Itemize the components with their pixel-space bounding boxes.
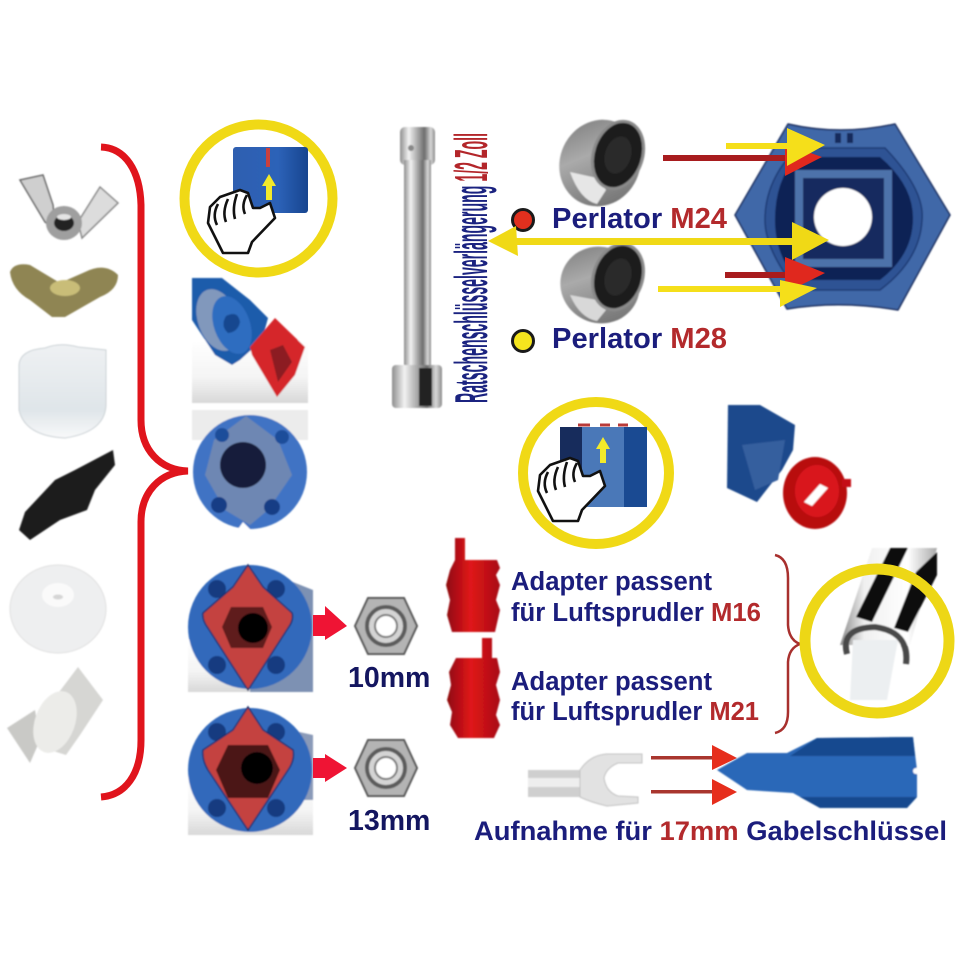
icon: black wing nut [19, 450, 115, 540]
top notches [835, 133, 853, 143]
yellow top arrow [726, 128, 825, 166]
yellow up arrow [262, 174, 276, 200]
centre hole [814, 188, 872, 246]
red top arrow [663, 144, 822, 176]
red marks [578, 424, 628, 426]
photo: blue tool end view [192, 410, 308, 534]
yellow double arrow [488, 222, 829, 260]
square socket [799, 174, 888, 263]
label: 10mm: 10mm [348, 662, 430, 694]
icon: red adapter M16 [446, 538, 500, 632]
label: Luftsprudler M16: für Luftsprudler M16 [511, 599, 761, 627]
icon: white round nut [10, 565, 106, 653]
icon: silver wing nut [20, 175, 118, 240]
wing nuts column [7, 175, 118, 763]
dark red brace [775, 555, 800, 733]
photo: 13 mm adapter view [188, 707, 313, 835]
icon: brass wing nut [10, 264, 118, 317]
arrow: to 13 mm nut [313, 754, 347, 782]
upper arrow [651, 745, 737, 770]
label: 13mm: 13mm [348, 805, 430, 837]
label: wrench caption: Aufnahme für 17mm Gabelschlüssel [474, 816, 947, 846]
panel: yellow circle with pull cylinder [184, 124, 332, 272]
icon: socket extension bar [392, 127, 442, 408]
blue block [560, 427, 647, 507]
icon: 13 mm nut [355, 740, 417, 796]
label: adapter M21: Adapter passent [511, 668, 713, 696]
icon: brass wing nut centre [50, 280, 80, 296]
icon: perlator M24 [545, 106, 655, 220]
icon: blue hex end [735, 124, 950, 310]
icon: red adapter M21 [447, 638, 500, 738]
icon: blue tool with red ring [727, 405, 851, 529]
marker: red dot [512, 210, 534, 230]
inner recess [775, 157, 913, 280]
icon: hand [208, 190, 275, 253]
label: Perlator M28: Perlator M28 [552, 323, 727, 355]
label: adapter M16: Adapter passent [511, 568, 713, 596]
icon: 10 mm nut [355, 598, 417, 654]
icon: hand [538, 458, 605, 521]
panel: yellow circle with blue slotted block [523, 402, 669, 544]
arrows: perlator to hex [488, 128, 829, 307]
arrow: to 10 mm nut [313, 606, 347, 640]
icon: open-end wrench [528, 754, 642, 806]
outer groove [765, 148, 922, 290]
faucet water [850, 640, 898, 700]
lower arrow [651, 779, 737, 805]
yellow lower arrow [658, 280, 817, 307]
photo: blue tool with red adapter [188, 278, 308, 403]
icon: white flat wing nut [7, 667, 103, 763]
marker: yellow dot [512, 330, 534, 352]
icon: blue hex socket tool [717, 737, 919, 808]
label: Luftsprudler M21: für Luftsprudler M21 [511, 698, 759, 726]
label: Perlator M24: Perlator M24 [552, 203, 727, 235]
faucet tube [840, 548, 937, 700]
red slot [266, 148, 270, 167]
yellow ring [805, 569, 949, 713]
blue cylinder [233, 147, 308, 213]
icon: perlator M28 [548, 234, 654, 336]
arrows: wrench to blue tool [651, 745, 737, 805]
panel: faucet circle [805, 548, 949, 713]
yellow up arrow [596, 437, 610, 463]
red curly bracket [101, 147, 188, 797]
photo: 10 mm adapter view [188, 565, 313, 692]
red lower arrow [725, 257, 825, 293]
icon: white plastic nut [19, 345, 106, 438]
